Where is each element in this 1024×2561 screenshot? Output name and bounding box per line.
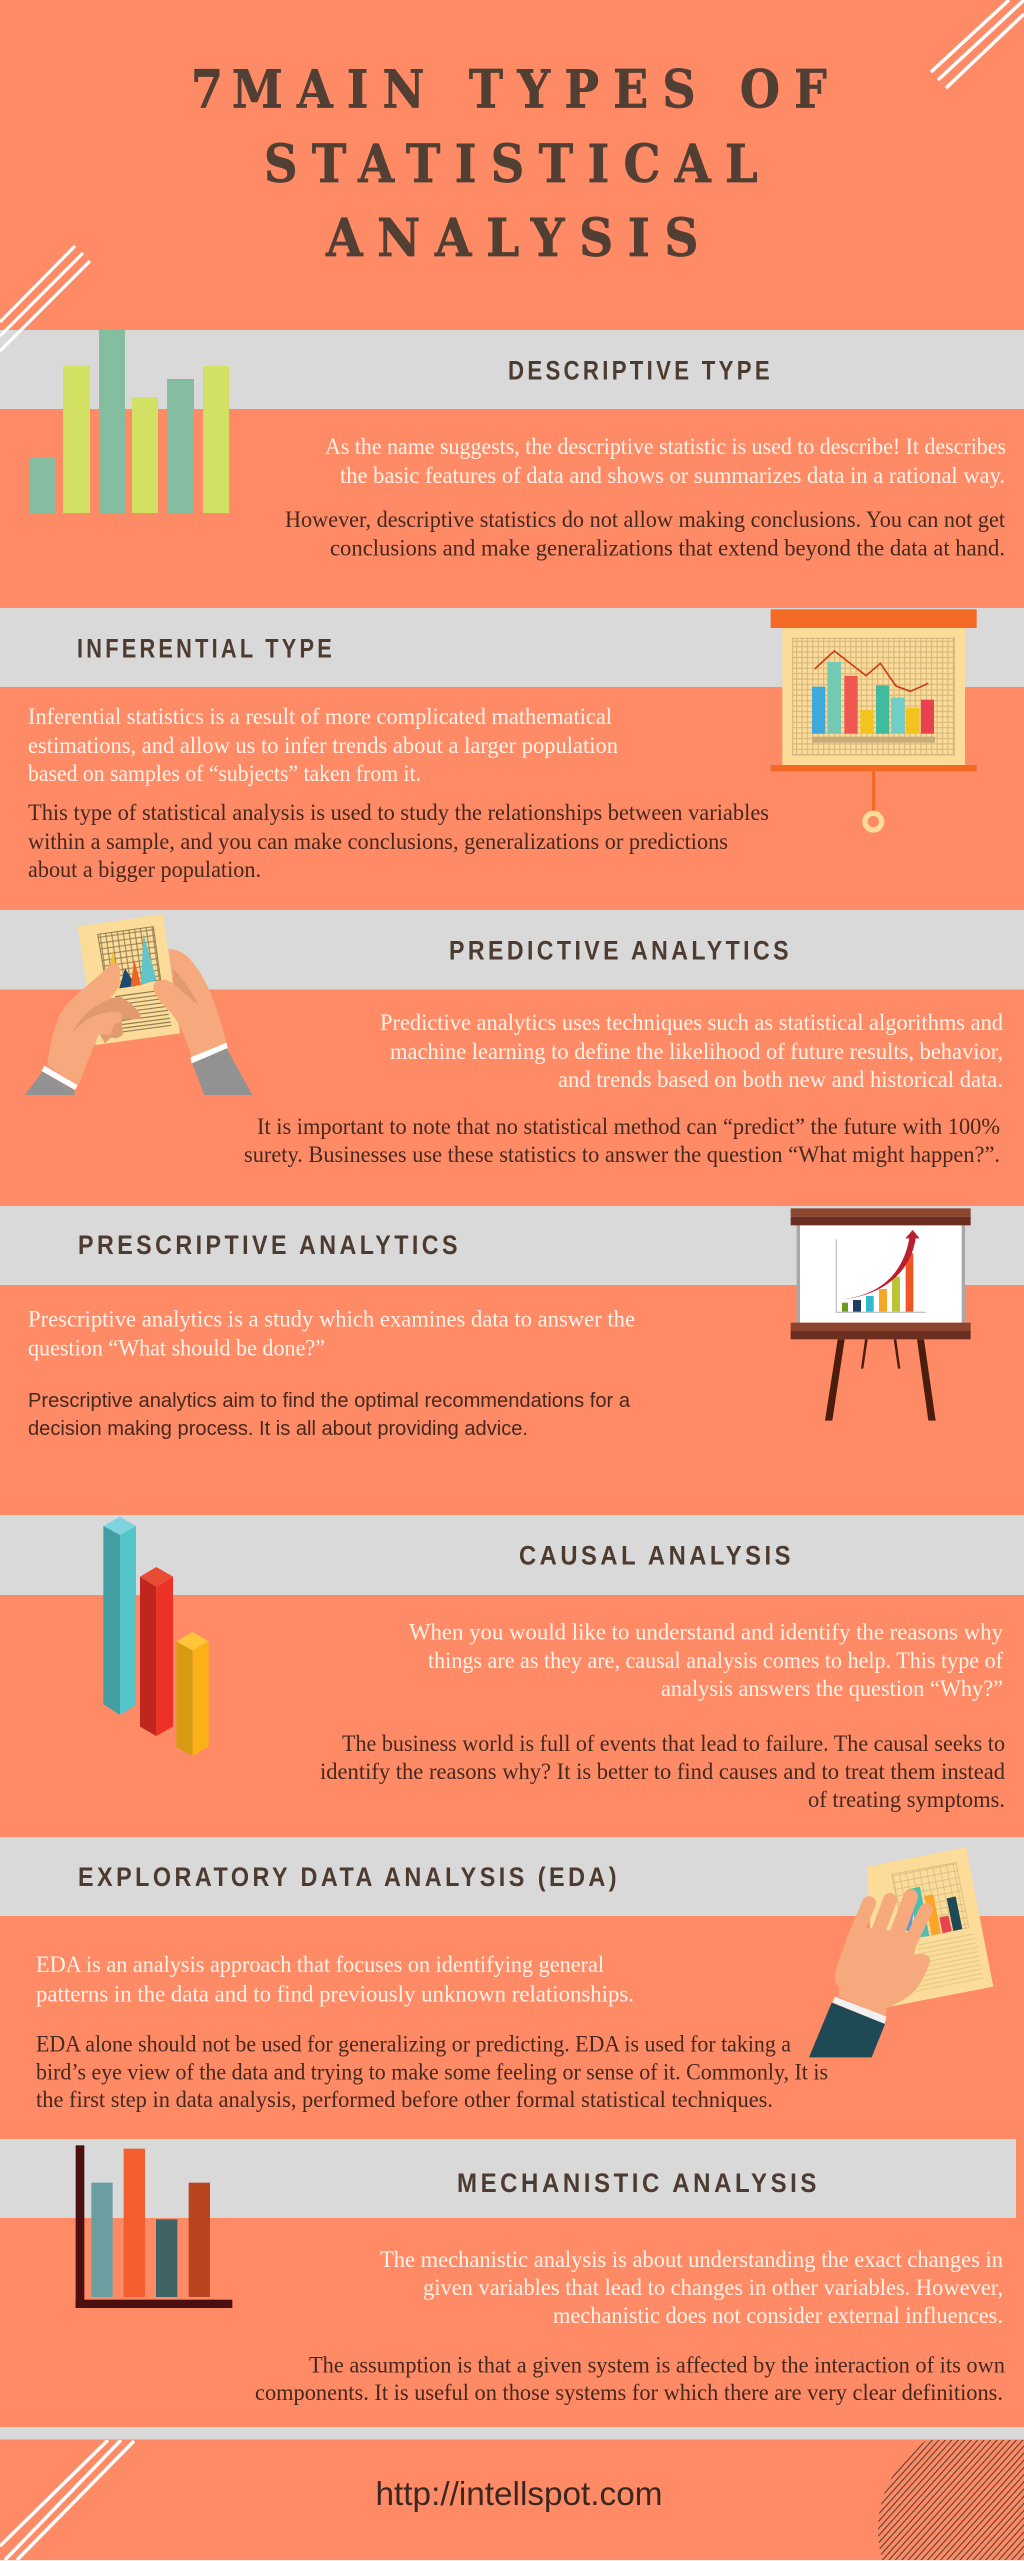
panel: causal analysis — [0, 1515, 1024, 1812]
text: prescriptive detail: Prescriptive analytics aim to find the optimal recommendations for a — [28, 1390, 631, 1412]
text: EDA intro: patterns in the data and to find previously unknown relationships. — [36, 1982, 634, 2006]
heading: inferential type: INFERENTIAL TYPE — [77, 634, 335, 664]
text: predictive intro: machine learning to define the likelihood of future results, behavior, — [390, 1039, 1003, 1064]
icon: projector screen chart — [771, 609, 977, 830]
text: inferential detail: within a sample, and you can make conclusions, generalizations or predictions — [28, 829, 728, 854]
text: prescriptive intro: Prescriptive analytics is a study which examines data to answer the — [28, 1306, 635, 1332]
text: descriptive detail: conclusions and make generalizations that extend beyond the data at hand. — [330, 536, 1005, 560]
icon: 3D bars — [103, 1517, 209, 1756]
decoration: footer stripes — [0, 2440, 134, 2560]
text: prescriptive intro — [28, 1306, 635, 1360]
text: causal detail — [320, 1731, 1005, 1812]
text: causal intro: When you would like to understand and identify the reasons why — [409, 1620, 1003, 1644]
text: descriptive intro — [325, 434, 1006, 488]
text: EDA intro — [36, 1952, 634, 2006]
text: mechanistic detail — [255, 2352, 1005, 2405]
text: inferential intro: estimations, and allow us to infer trends about a larger population — [28, 733, 618, 758]
text: causal intro — [409, 1620, 1003, 1701]
text: causal intro: analysis answers the question “Why?” — [661, 1676, 1003, 1701]
panel: footer — [0, 2423, 1024, 2561]
text: predictive intro: and trends based on both new and historical data. — [558, 1067, 1003, 1092]
title — [191, 60, 841, 269]
text: inferential detail — [28, 800, 769, 882]
heading: mechanistic analysis: MECHANISTIC ANALYSIS — [457, 2168, 820, 2198]
text: mechanistic intro: The mechanistic analysis is about understanding the exact changes in — [380, 2247, 1003, 2272]
icon: hand on report — [809, 1847, 993, 2057]
panel: prescriptive analytics — [0, 1206, 1024, 1440]
heading: prescriptive analytics: PRESCRIPTIVE ANALYTICS — [78, 1230, 461, 1260]
text: EDA intro: EDA is an analysis approach that focuses on identifying general — [36, 1952, 604, 1977]
heading: exploratory data analysis: EXPLORATORY DATA ANALYSIS (EDA) — [78, 1862, 620, 1892]
title: STATISTICAL — [264, 134, 772, 195]
title: ANALYSIS — [325, 208, 713, 269]
text: prescriptive detail: decision making process. It is all about providing advice. — [28, 1418, 528, 1440]
text: predictive detail — [244, 1114, 1000, 1167]
heading: predictive analytics: PREDICTIVE ANALYTICS — [449, 936, 792, 966]
decoration: top right stripes — [931, 0, 1024, 88]
text: predictive detail: surety. Businesses use these statistics to answer the question “What might happen?”. — [244, 1142, 1000, 1167]
panel: exploratory data analysis — [0, 1837, 1024, 2112]
text: inferential detail: about a bigger population. — [28, 857, 261, 882]
text: mechanistic intro — [380, 2247, 1003, 2328]
text: mechanistic detail: components. It is useful on those systems for which there are very clear definitions. — [255, 2380, 1003, 2405]
text: mechanistic detail: The assumption is that a given system is affected by the interaction of its own — [309, 2352, 1005, 2378]
panel: descriptive type — [0, 246, 1024, 560]
heading: descriptive type: DESCRIPTIVE TYPE — [508, 356, 773, 386]
text: mechanistic intro: given variables that lead to changes in other variables. However, — [423, 2275, 1003, 2300]
panel: mechanistic analysis — [0, 2139, 1016, 2405]
bottom edge — [0, 2560, 1024, 2561]
text: EDA detail: EDA alone should not be used for generalizing or predicting. EDA is used for taking a — [36, 2032, 791, 2056]
text: descriptive detail — [285, 507, 1006, 560]
text: EDA detail: the first step in data analysis, performed before other formal statistical techniques. — [36, 2087, 773, 2112]
text: descriptive detail: However, descriptive statistics do not allow making conclusions. You can not get — [285, 507, 1006, 532]
text: prescriptive intro: question “What should be done?” — [28, 1336, 325, 1360]
text: mechanistic intro: mechanistic does not consider external influences. — [553, 2303, 1003, 2328]
text: predictive detail: It is important to note that no statistical method can “predict” the future with 100% — [257, 1114, 1000, 1139]
decoration: hatched circle — [878, 2440, 1024, 2560]
text: predictive intro: Predictive analytics uses techniques such as statistical algorithms and — [380, 1010, 1003, 1035]
icon: axis bar chart — [76, 2145, 232, 2308]
text: EDA detail — [36, 2032, 828, 2112]
icon: hands holding report — [25, 914, 252, 1095]
text: inferential detail: This type of statistical analysis is used to study the relationships between variables — [28, 800, 769, 825]
text: inferential intro: Inferential statistics is a result of more complicated mathematical — [28, 704, 612, 729]
text: causal intro: things are as they are, causal analysis comes to help. This type of — [428, 1648, 1003, 1673]
icon: easel with growth chart — [791, 1208, 971, 1421]
heading: causal analysis: CAUSAL ANALYSIS — [519, 1540, 794, 1570]
icon: descriptive bar chart — [29, 330, 229, 513]
text: descriptive intro: As the name suggests, the descriptive statistic is used to describe! It describes — [325, 434, 1006, 459]
text: inferential intro — [28, 704, 618, 786]
text: causal detail: The business world is full of events that lead to failure. The causal seeks to — [342, 1731, 1005, 1756]
decoration: left stripes — [0, 246, 90, 351]
text: EDA detail: bird’s eye view of the data and trying to make some feeling or sense of it. Commonly, It is — [36, 2060, 828, 2084]
text: causal detail: of treating symptoms. — [808, 1787, 1005, 1812]
text: inferential intro: based on samples of “subjects” taken from it. — [28, 761, 421, 786]
text: predictive intro — [380, 1010, 1003, 1092]
source url: http://intellspot.com — [376, 2475, 662, 2512]
panel: predictive analytics — [0, 910, 1024, 1167]
text: descriptive intro: the basic features of data and shows or summarizes data in a rational way. — [340, 463, 1005, 488]
panel: inferential type — [0, 608, 1024, 882]
text: prescriptive detail — [28, 1390, 631, 1440]
title: 7MAIN TYPES OF — [191, 60, 841, 120]
text: causal detail: identify the reasons why? It is better to find causes and to treat them instead — [320, 1759, 1005, 1784]
